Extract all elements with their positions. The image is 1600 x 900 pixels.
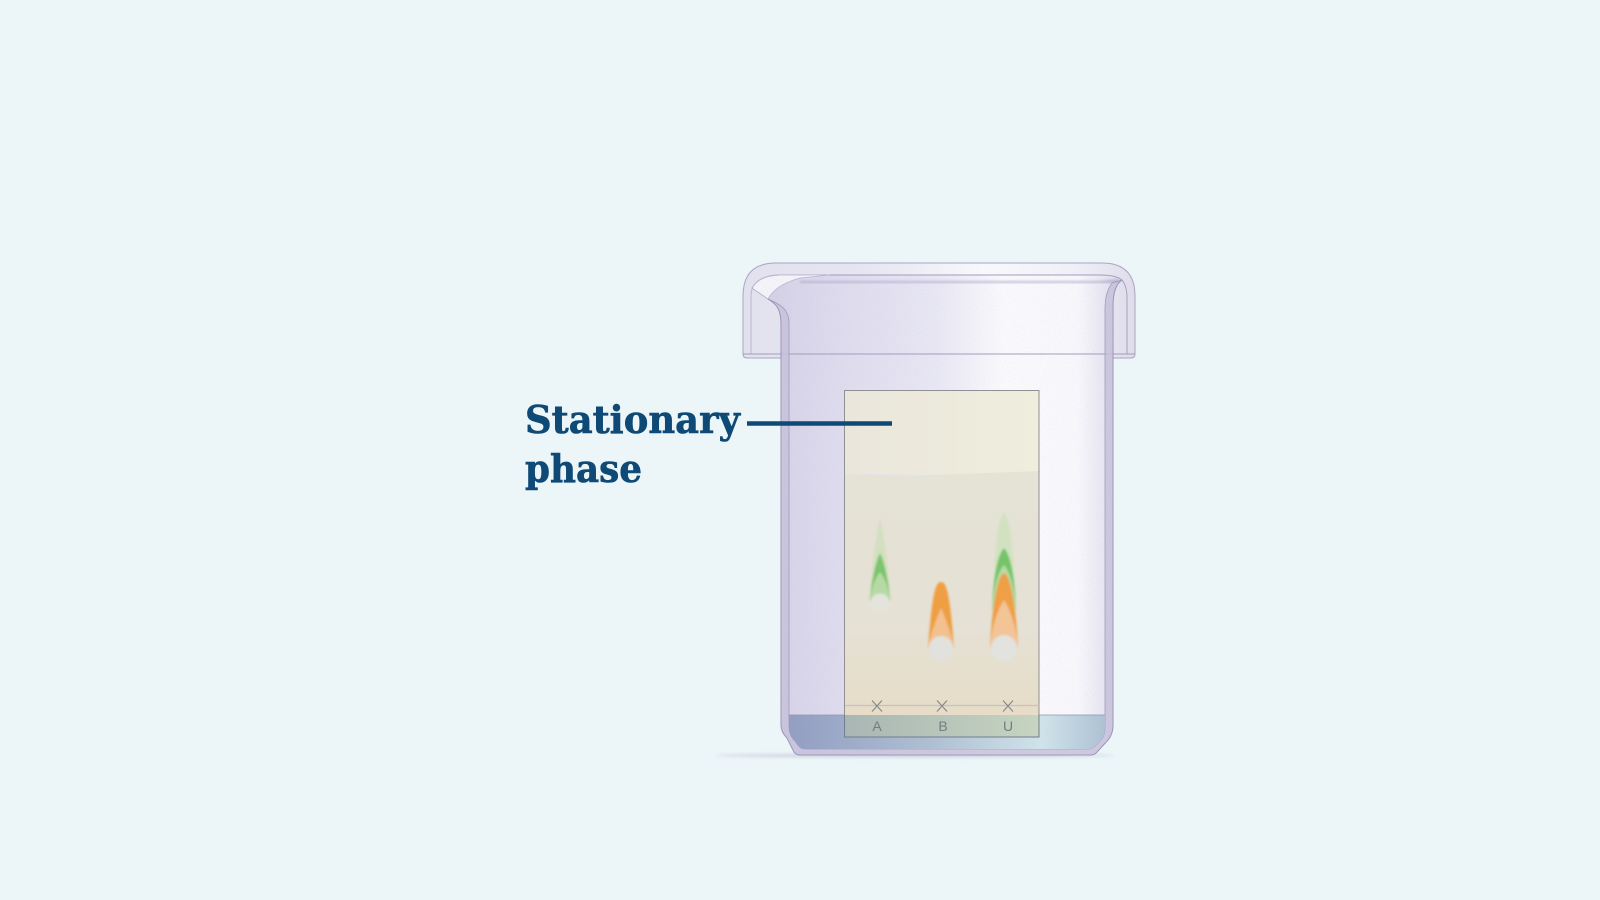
lip left inner curl [751, 275, 780, 354]
spot A dark green band [870, 553, 890, 600]
spot A origin [870, 594, 890, 612]
spot B origin [929, 636, 953, 660]
origin marks [872, 700, 1013, 712]
plate upper area [844, 390, 1039, 474]
plate outline [844, 390, 1039, 737]
plate submerged area [844, 715, 1039, 737]
baseline [845, 704, 1039, 706]
spout highlight [752, 275, 830, 299]
spot U [990, 512, 1018, 661]
glass grain texture [758, 276, 1092, 718]
liquid: mobile phase [789, 715, 1105, 749]
leader line [747, 421, 892, 426]
spot A mid green band [870, 572, 890, 602]
beaker outer lip [743, 263, 1135, 358]
lane labels: U [1003, 718, 1013, 734]
infographic: beaker with chromatography plate [526, 262, 1136, 759]
submerged plate edge [844, 715, 1039, 737]
lip inner band [800, 279, 1120, 283]
spot U origin [991, 635, 1017, 661]
spot U pale orange body [990, 600, 1018, 648]
label: Stationary phase [525, 397, 741, 491]
spot U mid green band [992, 565, 1016, 610]
spot B [928, 582, 954, 660]
table shadow [715, 753, 1115, 758]
label: Stationary phase: phase [525, 446, 642, 491]
spot A light green trail [870, 518, 890, 600]
spot U dark orange band [990, 573, 1018, 645]
spot U pale green trail [994, 512, 1014, 590]
lip bottom line [743, 353, 1135, 355]
TLC plate [844, 390, 1039, 737]
plate wetted area [844, 471, 1039, 715]
lane labels: B [938, 718, 948, 734]
spot B pale orange body [928, 608, 954, 648]
lip right inner curl [1122, 280, 1127, 354]
label: Stationary phase: Stationary [525, 397, 741, 442]
wall [768, 280, 1122, 755]
beaker body [752, 275, 1122, 755]
lane labels: A [872, 718, 882, 734]
spot A [870, 518, 890, 612]
beaker [743, 263, 1135, 758]
lane labels [872, 718, 1013, 734]
spot B dark orange trail [928, 582, 954, 648]
spot U dark green band [992, 548, 1016, 610]
